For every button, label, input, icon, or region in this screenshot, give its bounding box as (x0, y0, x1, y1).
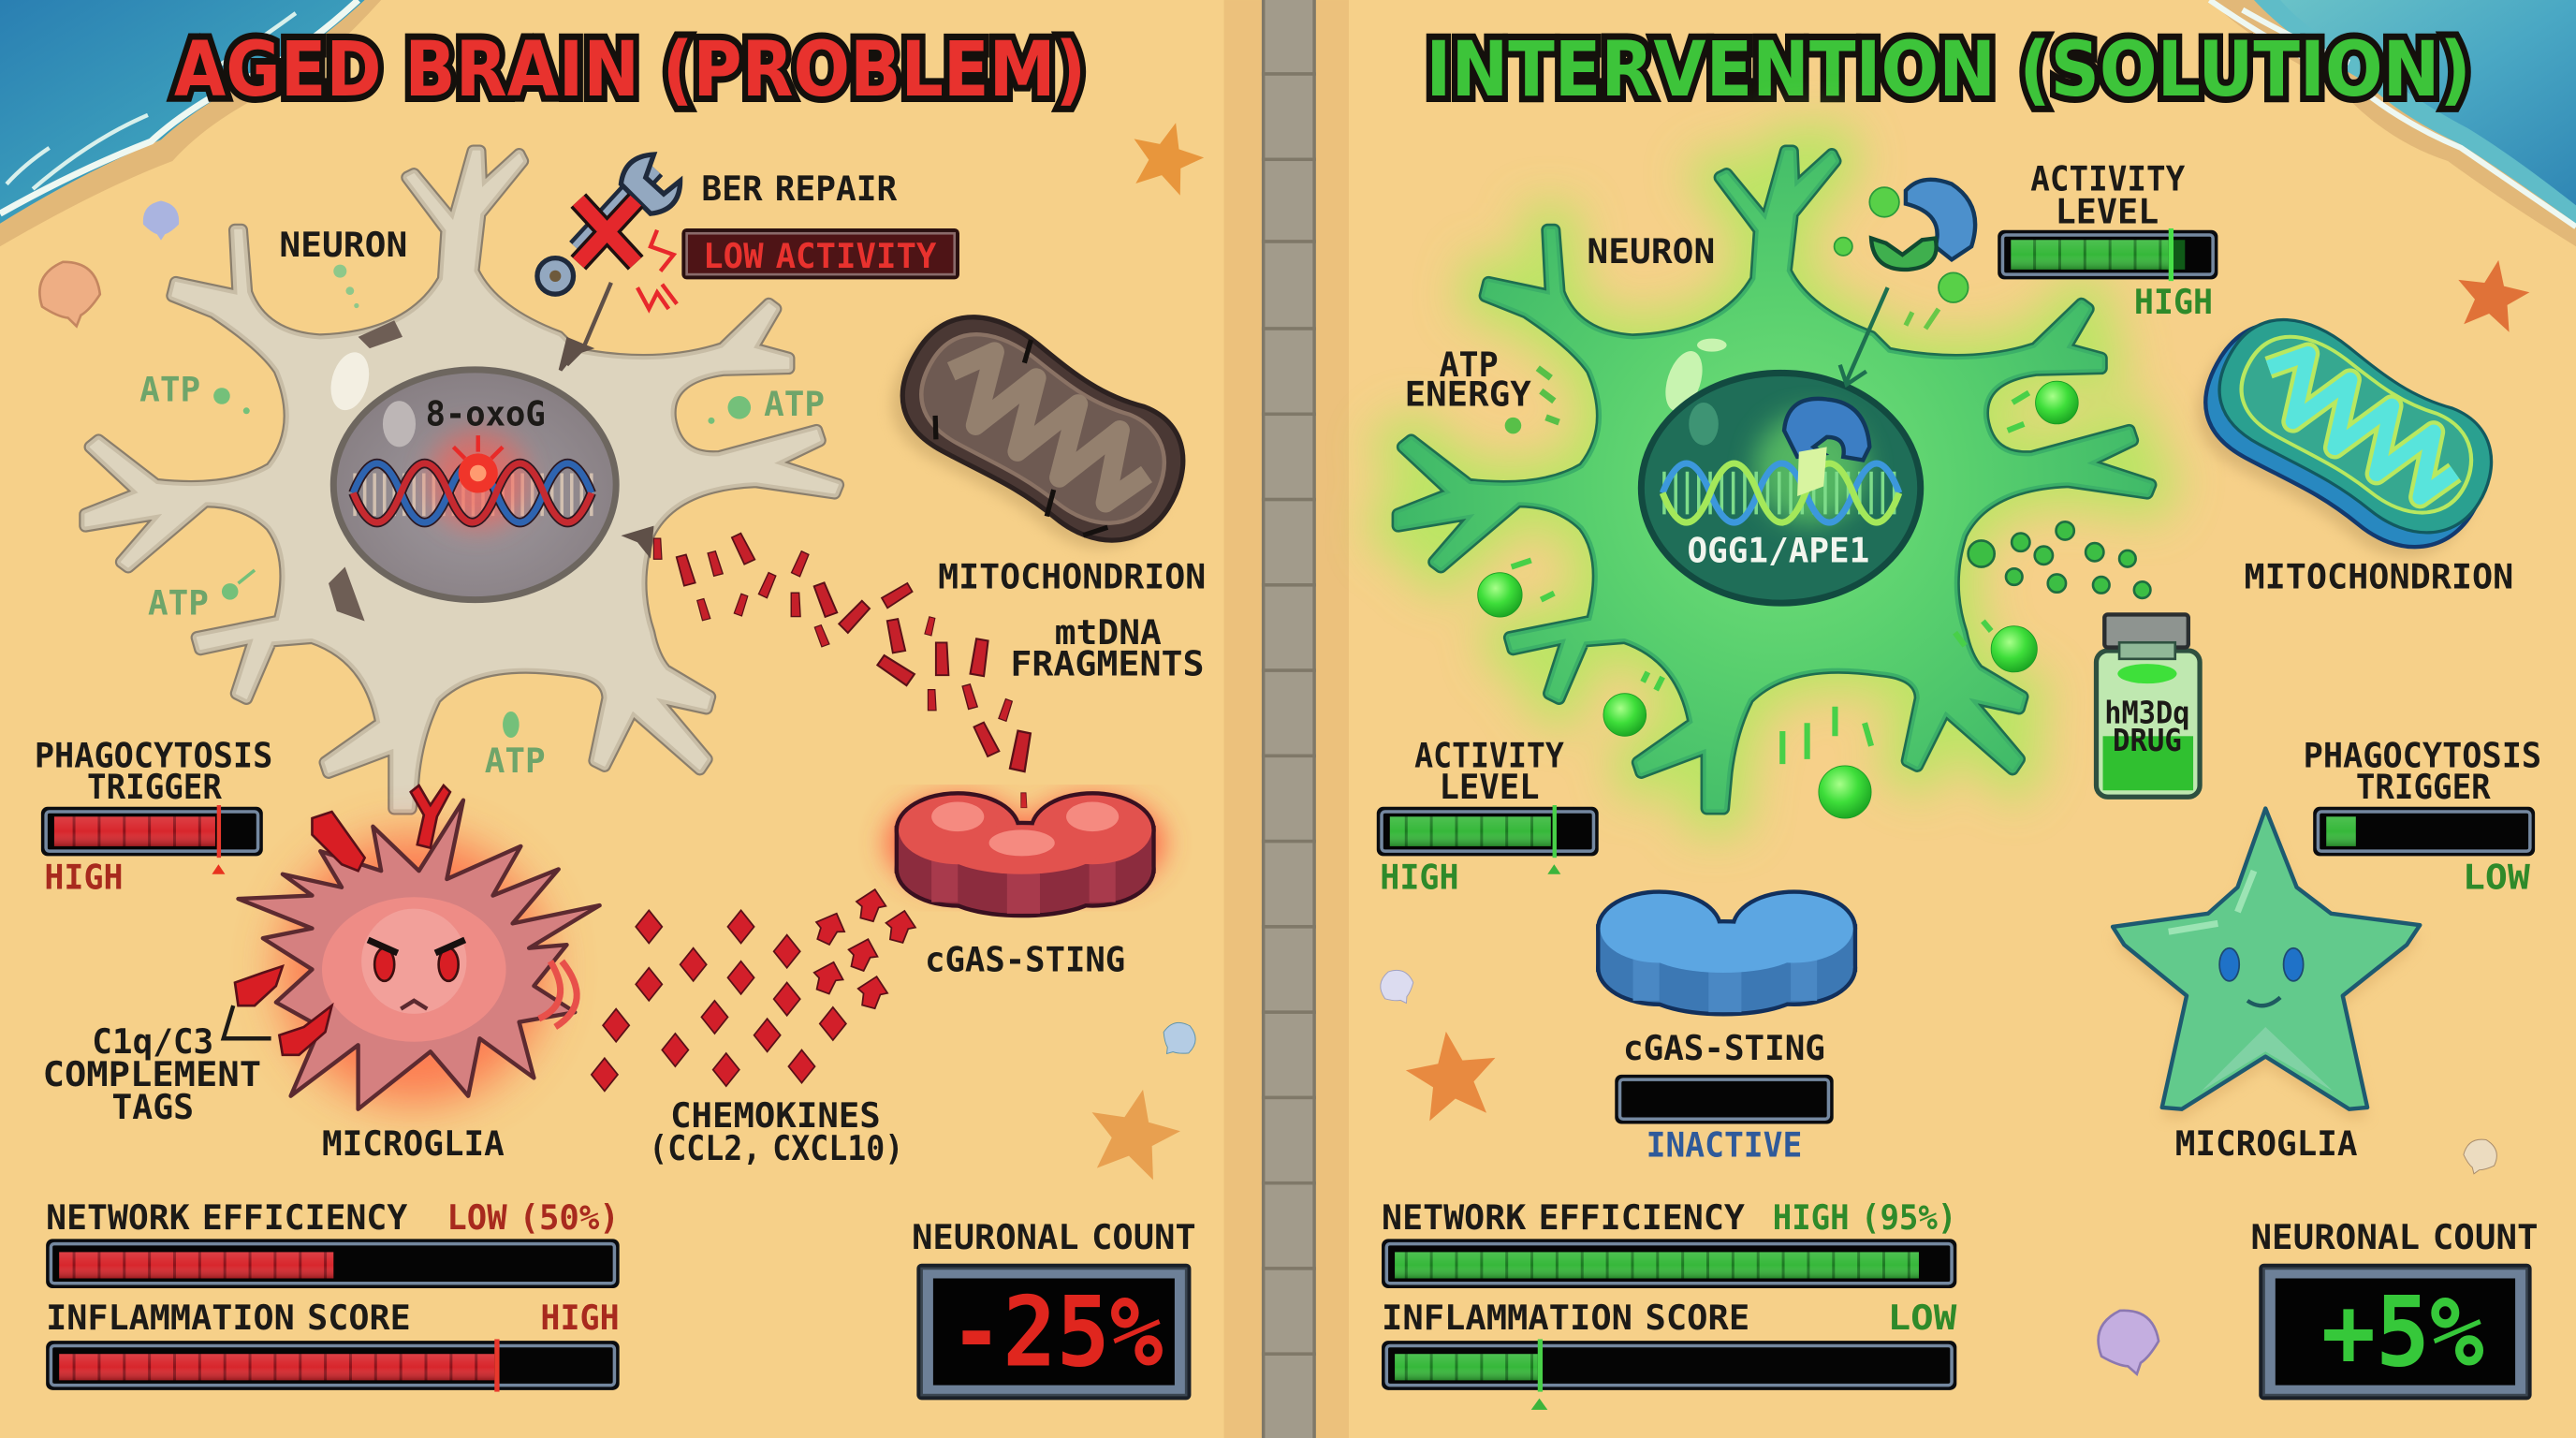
gauge: repair activity level high: HIGH (2134, 282, 2213, 322)
stat: neuronal count +5% (2250, 1217, 2539, 1400)
label: microglia: MICROGLIA (2175, 1123, 2358, 1164)
gauge: repair activity level high: LEVEL (2056, 192, 2159, 232)
label: 8-oxoG: 8-oxoG (426, 394, 546, 434)
gauge: inflammation score high (46, 1298, 620, 1392)
gauge: network efficiency low: LOW (50%) (446, 1197, 620, 1238)
label: chemokines: (CCL2, CXCL10) (649, 1128, 903, 1168)
label: mtdna fragments: FRAGMENTS (1010, 643, 1204, 683)
drug bottle: hm3dq: DRUG (2113, 722, 2182, 758)
label: c1q c3 complement tags: TAGS (111, 1087, 194, 1127)
gauge: inflammation score low: LOW (1888, 1298, 1957, 1338)
cgas-sting active (899, 795, 1151, 914)
gauge: inflammation score low (1382, 1298, 1957, 1410)
drug bottle: hm3dq (2097, 614, 2200, 797)
label: neuron: NEURON (1587, 231, 1715, 271)
label: atp energy: ATP (1439, 345, 1499, 385)
nucleus with dna damage (333, 370, 616, 600)
gauge: inflammation score low: INFLAMMATION SCORE (1382, 1298, 1749, 1338)
label and gauge: cgas-sting inactive: INACTIVE (1647, 1125, 1802, 1166)
ocean top-right (2143, 0, 2576, 246)
atp faded indicators: ATP (764, 384, 825, 424)
badge: low activity: LOW ACTIVITY (703, 236, 937, 276)
gauge: phagocytosis trigger high: HIGH (44, 858, 124, 898)
sand strip beside wall (1224, 0, 1349, 1438)
stat: neuronal count +5%: NEURONAL COUNT (2250, 1217, 2539, 1257)
label: chemokines (649, 1095, 903, 1168)
ocean top-left (0, 0, 381, 246)
label: chemokines: CHEMOKINES (670, 1095, 881, 1136)
gauge: phagocytosis trigger high: PHAGOCYTOSIS (35, 736, 272, 776)
neuron: damaged (85, 151, 838, 809)
mitochondrion: damaged (869, 286, 1208, 580)
label: mitochondrion: MITOCHONDRION (2244, 556, 2513, 596)
gauge: network efficiency high: NETWORK EFFICIENCY (1382, 1197, 1746, 1238)
stat: neuronal count +5%: +5% (2321, 1277, 2484, 1389)
neuron glow (1398, 151, 2150, 809)
label: cgas-sting: cGAS-STING (925, 939, 1125, 979)
microglia: resting starfish (2113, 809, 2420, 1119)
drug particles (1969, 521, 2150, 598)
label: mitochondrion: MITOCHONDRION (938, 556, 1206, 596)
title: aged brain: AGED BRAIN (PROBLEM) (174, 26, 1086, 114)
stat: neuronal count -25%: -25% (949, 1277, 1164, 1389)
gauge: inflammation score high: INFLAMMATION SCORE (46, 1298, 411, 1338)
label: ogg1/ape1: OGG1/APE1 (1687, 530, 1869, 570)
gauge: repair activity level high: ACTIVITY (2030, 159, 2186, 199)
chemokines (592, 886, 919, 1091)
gauge: network efficiency low (46, 1197, 620, 1288)
label and gauge: cgas-sting inactive (1615, 1028, 1834, 1166)
gauge: phagocytosis trigger low: LOW (2463, 858, 2531, 898)
label and gauge: cgas-sting inactive: cGAS-STING (1623, 1028, 1825, 1068)
label: c1q c3 complement tags: C1q/C3 (92, 1021, 213, 1062)
label: neuron: NEURON (279, 225, 407, 265)
stone wall divider (1264, 0, 1314, 1438)
stat: neuronal count -25% (912, 1217, 1196, 1400)
gauge: phagocytosis trigger low (2304, 736, 2541, 898)
panel: intervention solution (1374, 26, 2541, 1410)
gauge: activity level high: ACTIVITY (1414, 736, 1565, 776)
decorative beach items (34, 113, 1210, 1183)
gauge: repair activity level high (1998, 159, 2217, 322)
atp orbs (1478, 381, 2078, 818)
gauge: network efficiency high: HIGH (95%) (1773, 1197, 1956, 1238)
label: mtdna fragments (1010, 612, 1204, 683)
gauge: phagocytosis trigger high (35, 736, 272, 898)
icon: repair enzyme parts (1835, 180, 1975, 329)
label: c1q c3 complement tags (43, 1021, 261, 1127)
atp faded indicators (139, 265, 825, 781)
label: microglia: MICROGLIA (322, 1123, 505, 1164)
nucleus with repair (1641, 373, 1921, 603)
atp faded indicators: ATP (148, 582, 209, 623)
atp faded indicators: ATP (485, 741, 546, 781)
gauge: phagocytosis trigger low: PHAGOCYTOSIS (2304, 736, 2541, 776)
label: c1q c3 complement tags: COMPLEMENT (43, 1054, 261, 1094)
atp faded indicators: ATP (139, 369, 200, 409)
gauge: activity level high (1377, 736, 1599, 898)
arrow: enzyme to nucleus (1840, 287, 1888, 385)
icon: broken wrench (537, 154, 681, 365)
mtdna fragments (653, 533, 1032, 808)
gauge: network efficiency high (1382, 1197, 1956, 1288)
complement tags attached (235, 785, 450, 1055)
decorative beach items (1374, 254, 2534, 1382)
stat: neuronal count -25%: NEURONAL COUNT (912, 1217, 1196, 1257)
gauge: inflammation score high: HIGH (540, 1298, 620, 1338)
callout line: complement tags (224, 1005, 271, 1038)
badge: low activity (681, 228, 959, 279)
title: intervention: INTERVENTION (SOLUTION) (1426, 26, 2471, 114)
gauge: phagocytosis trigger low: TRIGGER (2356, 767, 2491, 807)
label: ber repair: BER REPAIR (701, 169, 898, 209)
gauge: phagocytosis trigger high: TRIGGER (87, 767, 223, 807)
panel: aged brain problem (34, 26, 1210, 1400)
gauge: activity level high: LEVEL (1439, 767, 1540, 807)
neuron: healthy (1398, 151, 2150, 809)
cgas-sting inactive (1600, 894, 1853, 1012)
label: mtdna fragments: mtDNA (1055, 612, 1162, 653)
mitochondrion: healthy (2174, 287, 2514, 587)
gauge: network efficiency low: NETWORK EFFICIENCY (46, 1197, 408, 1238)
drug bottle: hm3dq: hM3Dq (2104, 694, 2190, 730)
microglia: activated (238, 800, 600, 1109)
gauge: activity level high: HIGH (1380, 858, 1459, 898)
label: atp energy: ENERGY (1405, 374, 1532, 415)
label: atp energy (1405, 345, 1559, 433)
